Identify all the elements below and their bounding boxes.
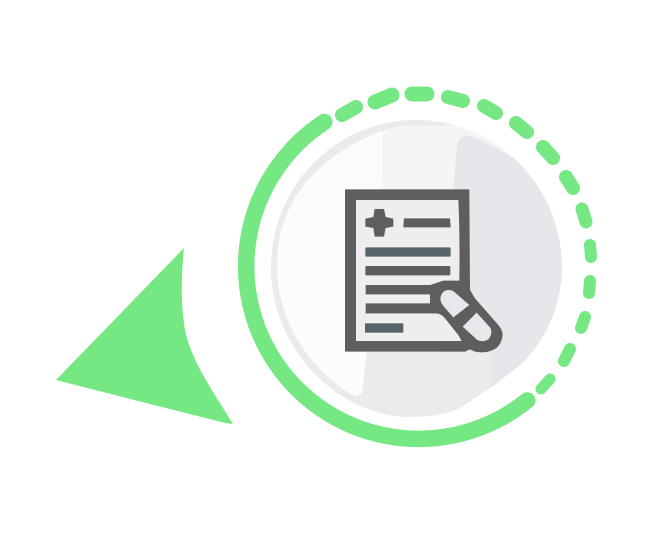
disc base shade (271, 120, 513, 417)
dashed arc (342, 94, 591, 389)
disc top light band (381, 126, 512, 189)
icon: prescription document with pill (345, 189, 503, 352)
disc left white area (277, 131, 382, 396)
progress ring (246, 94, 591, 439)
pill lower half (463, 313, 491, 341)
document frame with pill outline (345, 189, 503, 352)
teal line (365, 247, 451, 257)
solid arc (246, 122, 527, 439)
short teal line (365, 323, 403, 333)
arrow pointer (56, 248, 233, 424)
heading line (403, 218, 451, 227)
text line (365, 266, 450, 275)
medical cross (365, 209, 393, 237)
pill-adjacent text lines (366, 285, 437, 313)
pill upper half (440, 290, 469, 317)
disc right shade (440, 136, 575, 420)
inner disc (271, 120, 562, 417)
document page (356, 200, 462, 341)
